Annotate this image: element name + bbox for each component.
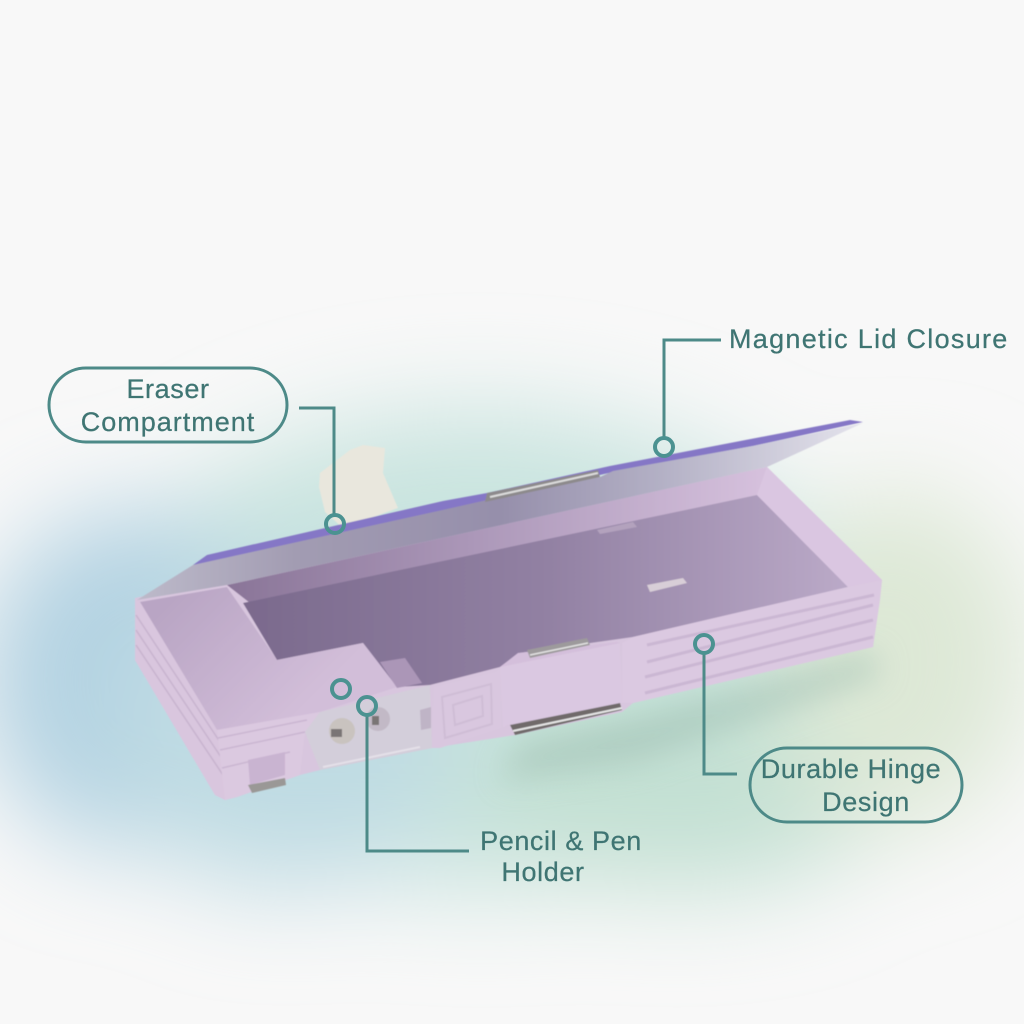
label pill bbox=[49, 368, 287, 442]
front right panel bbox=[622, 580, 882, 703]
case body silhouette bbox=[135, 467, 882, 800]
label text: Durable Hinge bbox=[761, 754, 941, 784]
back wall bbox=[227, 467, 767, 603]
callout: durable hinge design bbox=[695, 635, 962, 822]
marker bbox=[655, 438, 673, 456]
label text: Magnetic Lid Closure bbox=[729, 324, 1009, 354]
floor bbox=[243, 495, 848, 687]
callout: eraser compartment bbox=[49, 368, 344, 533]
callout: magnetic lid closure bbox=[655, 324, 1009, 456]
callout: pencil and pen holder bbox=[332, 680, 642, 887]
marker bbox=[695, 635, 713, 653]
second marker bbox=[332, 680, 350, 698]
ribs bbox=[645, 595, 874, 693]
center latch panel bbox=[500, 643, 622, 728]
front left window bbox=[248, 752, 285, 785]
inner shelf bbox=[500, 642, 620, 667]
metal clasp inner bbox=[527, 638, 590, 658]
label text: Holder bbox=[501, 857, 585, 887]
right inner wall bbox=[757, 467, 882, 587]
front left wall bbox=[217, 712, 320, 800]
leader line bbox=[299, 408, 334, 516]
compartment plate bbox=[140, 587, 397, 730]
leader line bbox=[704, 654, 737, 774]
marker bbox=[358, 697, 376, 715]
label text: Eraser bbox=[126, 374, 210, 404]
clear compartment bbox=[305, 685, 432, 770]
background glow bbox=[0, 410, 1024, 890]
lid underside bbox=[137, 423, 863, 600]
eraser bbox=[319, 445, 398, 528]
label text: Pencil & Pen bbox=[480, 826, 642, 856]
label text: Compartment bbox=[81, 407, 255, 437]
case shadow bbox=[500, 652, 880, 780]
label text: Design bbox=[822, 787, 910, 817]
floor slots bbox=[647, 578, 687, 592]
lid hinge metal bbox=[485, 470, 600, 502]
metal clasp bottom bbox=[510, 703, 622, 735]
lid purple band bbox=[193, 420, 863, 568]
left outer wall bbox=[135, 598, 232, 800]
leader line bbox=[367, 716, 469, 851]
small metal clip bbox=[248, 778, 286, 793]
pen well bbox=[380, 658, 422, 688]
leader line bbox=[664, 340, 721, 438]
marker bbox=[326, 515, 344, 533]
pencil case bbox=[135, 420, 882, 800]
label pill bbox=[750, 748, 962, 822]
square panel bbox=[432, 668, 502, 748]
